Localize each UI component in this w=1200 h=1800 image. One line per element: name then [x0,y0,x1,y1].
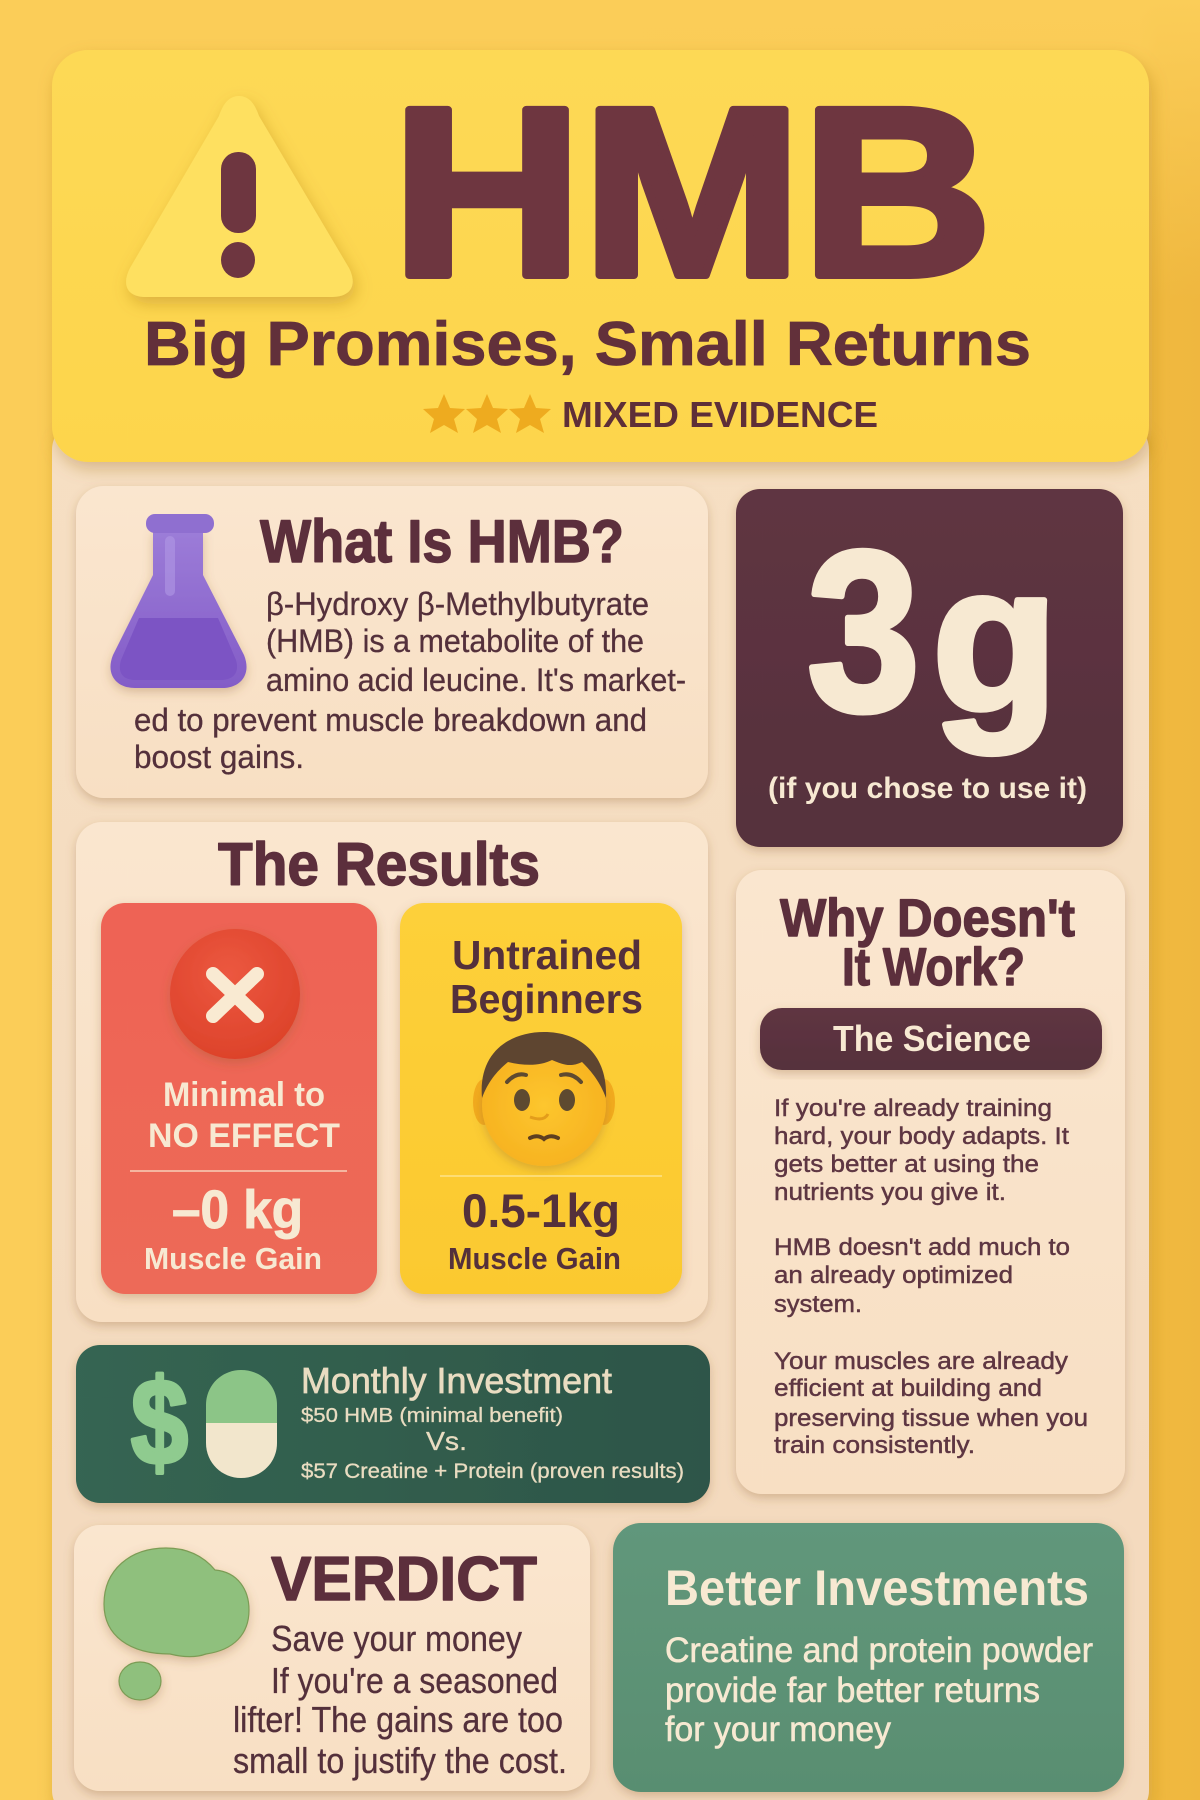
body text: If you're a seasoned [271,1660,558,1701]
icon: warning triangle [126,96,353,297]
body text: (HMB) is a metabolite of the [266,623,644,659]
icon: thought bubble [104,1548,249,1700]
panel: 3g dose [736,489,1123,847]
comparison text: $50 HMB (minimal benefit) [301,1405,563,1427]
icon: red X [170,929,300,1059]
label [148,1076,340,1155]
evidence label: MIXED EVIDENCE [562,394,878,435]
icon: capsule [206,1370,277,1478]
heading [780,889,1075,997]
caption: Muscle Gain [144,1241,322,1276]
heading: It Work? [842,938,1025,997]
heading: Better Investments [665,1560,1089,1616]
dose caption: (if you chose to use it) [768,772,1087,805]
icon: three stars [423,394,551,433]
body text: HMB doesn't add much to [774,1234,1070,1261]
heading: Why Doesn't [780,889,1075,948]
body text: hard, your body adapts. It [774,1123,1069,1150]
title: HMB: HMB [392,58,992,326]
subtitle: Big Promises, Small Returns [144,310,1031,379]
panel: what is HMB [76,486,708,798]
label [450,932,643,1022]
body text [665,1631,1093,1749]
body text: β-Hydroxy β-Methylbutyrate [266,586,649,622]
big number: 3 [807,505,920,759]
body text [774,1095,1088,1459]
panel: monthly investment [76,1345,710,1503]
panel: better investments [613,1523,1124,1792]
body text: an already optimized [774,1262,1013,1289]
label: NO EFFECT [148,1117,340,1155]
comparison text [301,1405,684,1483]
body text: If you're already training [774,1095,1052,1122]
panel: the results [76,822,708,1322]
caption: Muscle Gain [448,1241,621,1276]
body text: small to justify the cost. [233,1740,567,1781]
value: 0.5-1kg [462,1184,620,1237]
body text: Your muscles are already [774,1348,1068,1375]
body text: nutrients you give it. [774,1179,1006,1206]
big number: g [932,523,1058,755]
panel: why doesn't it work [736,870,1125,1494]
body text: boost gains. [134,739,304,775]
body text: train consistently. [774,1432,975,1459]
body text: gets better at using the [774,1151,1039,1178]
comparison text: Vs. [426,1426,467,1456]
body text: efficient at building and [774,1375,1042,1402]
icon: worried face [473,1032,615,1166]
body text: Creatine and protein powder [665,1631,1093,1670]
label: Minimal to [163,1076,325,1114]
body text [134,586,686,775]
value: –0 kg [172,1180,303,1240]
card: no effect [101,903,377,1294]
body text: ed to prevent muscle breakdown and [134,702,647,738]
body text: system. [774,1291,862,1318]
heading: What Is HMB? [260,508,624,575]
heading: VERDICT [271,1545,537,1614]
panel: header [52,50,1149,462]
heading: The Results [218,831,540,898]
pill: the science [760,1008,1102,1070]
body text: lifter! The gains are too [233,1699,563,1740]
body text: Save your money [271,1618,522,1659]
body text: for your money [665,1710,891,1749]
body text: amino acid leucine. It's market- [266,662,686,698]
comparison text: $57 Creatine + Protein (proven results) [301,1460,684,1483]
body text [233,1618,567,1781]
label: Untrained [452,932,642,978]
label: Beginners [450,976,643,1022]
body text: preserving tissue when you [774,1405,1088,1432]
card: untrained beginners [400,903,682,1294]
panel: verdict [74,1525,590,1791]
icon: dollar sign: $ [131,1354,188,1490]
body text: provide far better returns [665,1671,1040,1710]
panel: cream page background [52,420,1149,1800]
icon: purple flask [110,514,247,688]
heading: Monthly Investment [301,1360,612,1401]
pill: the science: The Science [833,1018,1031,1059]
